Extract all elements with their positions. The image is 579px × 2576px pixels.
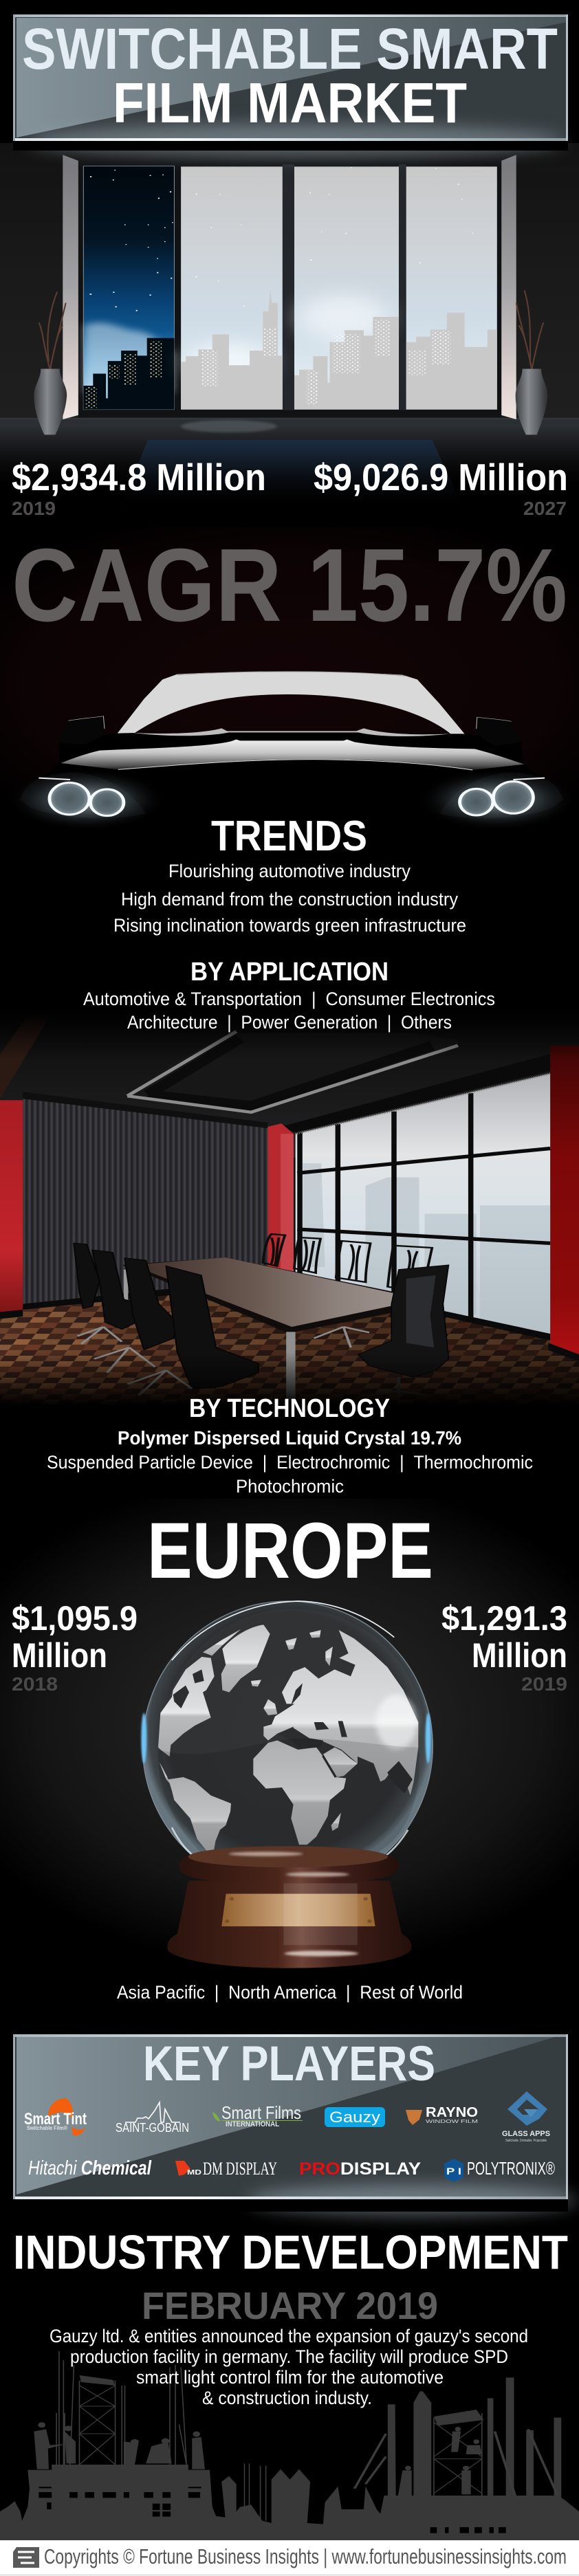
logo: smart tint — [24, 2098, 87, 2135]
logo: smart tint: Smart Tint — [24, 2110, 87, 2128]
text block: other regions: Asia Pacific | North America | Rest of World — [117, 1982, 463, 2003]
heading: by application: BY APPLICATION — [190, 958, 389, 987]
heading: title line two: FILM MARKET — [113, 71, 467, 135]
stat: 2019 market size: 2019 — [12, 498, 56, 519]
logo: saint-gobain: SAINT-GOBAIN — [116, 2121, 189, 2135]
text block: trends list: Rising inclination towards green infrastructure — [113, 915, 466, 936]
workers — [34, 2422, 482, 2496]
text block: industry development copy: smart light control film for the automotive — [136, 2367, 444, 2388]
heading: key players: KEY PLAYERS — [143, 2037, 435, 2091]
window frame — [78, 161, 501, 417]
stat: europe 2018: Million — [12, 1636, 107, 1675]
logo: gauzy: Gauzy — [329, 2109, 380, 2126]
logo: hitachi chemical: Hitachi Chemical — [28, 2157, 152, 2179]
logo: glass apps: Switchable. Dimmable. Projectable — [505, 2139, 547, 2143]
clear night pane — [83, 166, 174, 410]
illustration: wooden base — [167, 1846, 411, 1968]
text block: application segments — [83, 989, 495, 1033]
stat: europe 2018 — [12, 1599, 138, 1695]
stat: 2019 market size — [12, 456, 266, 519]
logo: glass apps — [502, 2091, 550, 2143]
plaque — [221, 1894, 375, 1926]
panel: europe backdrop — [0, 1499, 579, 1994]
logo: dm display: DM DISPLAY — [203, 2159, 277, 2179]
text block: trends list: High demand from the construction industry — [121, 889, 458, 910]
heading: by technology: BY TECHNOLOGY — [189, 1394, 390, 1423]
logo: smart films — [212, 2102, 303, 2128]
panel: title — [13, 14, 568, 157]
illustration: car — [8, 672, 576, 857]
frosted panes — [181, 166, 497, 410]
stat: 2019 market size: $2,934.8 Million — [12, 456, 266, 498]
inland seas — [173, 1669, 413, 1793]
back chairs — [263, 1234, 432, 1292]
text block: technology segments: Photochromic — [236, 1476, 344, 1497]
continents — [158, 1625, 418, 1855]
logo: smart films: Smart Films — [221, 2102, 301, 2123]
icon: right headlight — [417, 769, 576, 830]
stat: 2027 market size — [314, 456, 568, 519]
stat: europe 2019: 2019 — [521, 1673, 567, 1695]
logo: rayno: RAYNO — [426, 2105, 478, 2120]
logo: smart tint: Switchable Film® — [27, 2125, 67, 2131]
logo: rayno — [406, 2105, 478, 2125]
stat: europe 2018: 2018 — [12, 1673, 58, 1695]
stat: europe 2019 — [441, 1599, 567, 1695]
icon: left vase — [34, 291, 67, 434]
text block: application segments: Architecture | Power Generation | Others — [127, 1012, 452, 1033]
icon: fortune business insights logo — [13, 2547, 39, 2568]
text block: technology segments — [47, 1427, 533, 1497]
hood highlight — [61, 740, 525, 770]
text block: trends list: Flourishing automotive industry — [168, 861, 411, 881]
floor fade — [0, 1352, 579, 1406]
heading: february 2019: FEBRUARY 2019 — [142, 2284, 438, 2327]
panel: key players — [13, 2034, 578, 2215]
panel: red tinted backdrop — [0, 502, 579, 866]
heading: europe: EUROPE — [147, 1507, 433, 1595]
heading: trends: TRENDS — [211, 813, 367, 860]
table top — [122, 1257, 437, 1332]
stat: europe 2018: $1,095.9 — [12, 1599, 138, 1638]
logo: prodisplay: PRODISPLAY — [299, 2159, 421, 2179]
text block: technology segments: Polymer Dispersed Liquid Crystal 19.7% — [118, 1427, 461, 1449]
room floor, table and chairs — [0, 1234, 579, 1411]
footer — [0, 2540, 579, 2576]
text block: industry development copy: production facility in germany. The facility will produce SPD — [70, 2346, 508, 2367]
panel: window scene — [0, 143, 579, 527]
logo: polytronix: P I — [446, 2166, 461, 2177]
text block: trends list — [113, 861, 466, 936]
glass reflections — [376, 1695, 417, 1750]
icon: left headlight — [8, 769, 166, 830]
illustration: construction silhouette — [0, 2351, 579, 2540]
stat: europe 2019: $1,291.3 — [441, 1599, 567, 1638]
logo: polytronix — [444, 2158, 555, 2182]
text block: application segments: Automotive & Transportation | Consumer Electronics — [83, 989, 495, 1009]
logo: rayno: WINDOW FILM — [426, 2120, 478, 2124]
logo: gauzy — [325, 2107, 385, 2127]
text block: industry development copy: & construction industy. — [202, 2388, 372, 2408]
scaffolds and struts — [56, 2351, 482, 2521]
front left chairs — [74, 1243, 259, 1389]
logo: saint-gobain — [116, 2102, 189, 2135]
illustration: boardroom — [0, 1012, 579, 1411]
room shell — [0, 1012, 579, 1360]
text block: industry development copy — [50, 2326, 528, 2408]
stat: 2027 market size: 2027 — [523, 498, 567, 519]
logo: glass apps: GLASS APPS — [502, 2130, 550, 2138]
logo: dm display: MD — [187, 2169, 201, 2177]
text block: industry development copy: Gauzy ltd. & entities announced the expansion of gauzy's second — [50, 2326, 528, 2346]
illustration: glass globe — [141, 1600, 433, 1892]
logo: smart films: INTERNATIONAL — [226, 2120, 279, 2128]
front right chair — [358, 1265, 448, 1377]
logo: dm display — [175, 2159, 277, 2179]
text block: technology segments: Suspended Particle Device | Electrochromic | Thermochromic — [47, 1452, 533, 1473]
stat: europe 2019: Million — [472, 1636, 567, 1675]
rear chair base — [314, 1327, 369, 1347]
icon: mirrors — [59, 716, 105, 745]
icon: right vase — [516, 290, 547, 434]
